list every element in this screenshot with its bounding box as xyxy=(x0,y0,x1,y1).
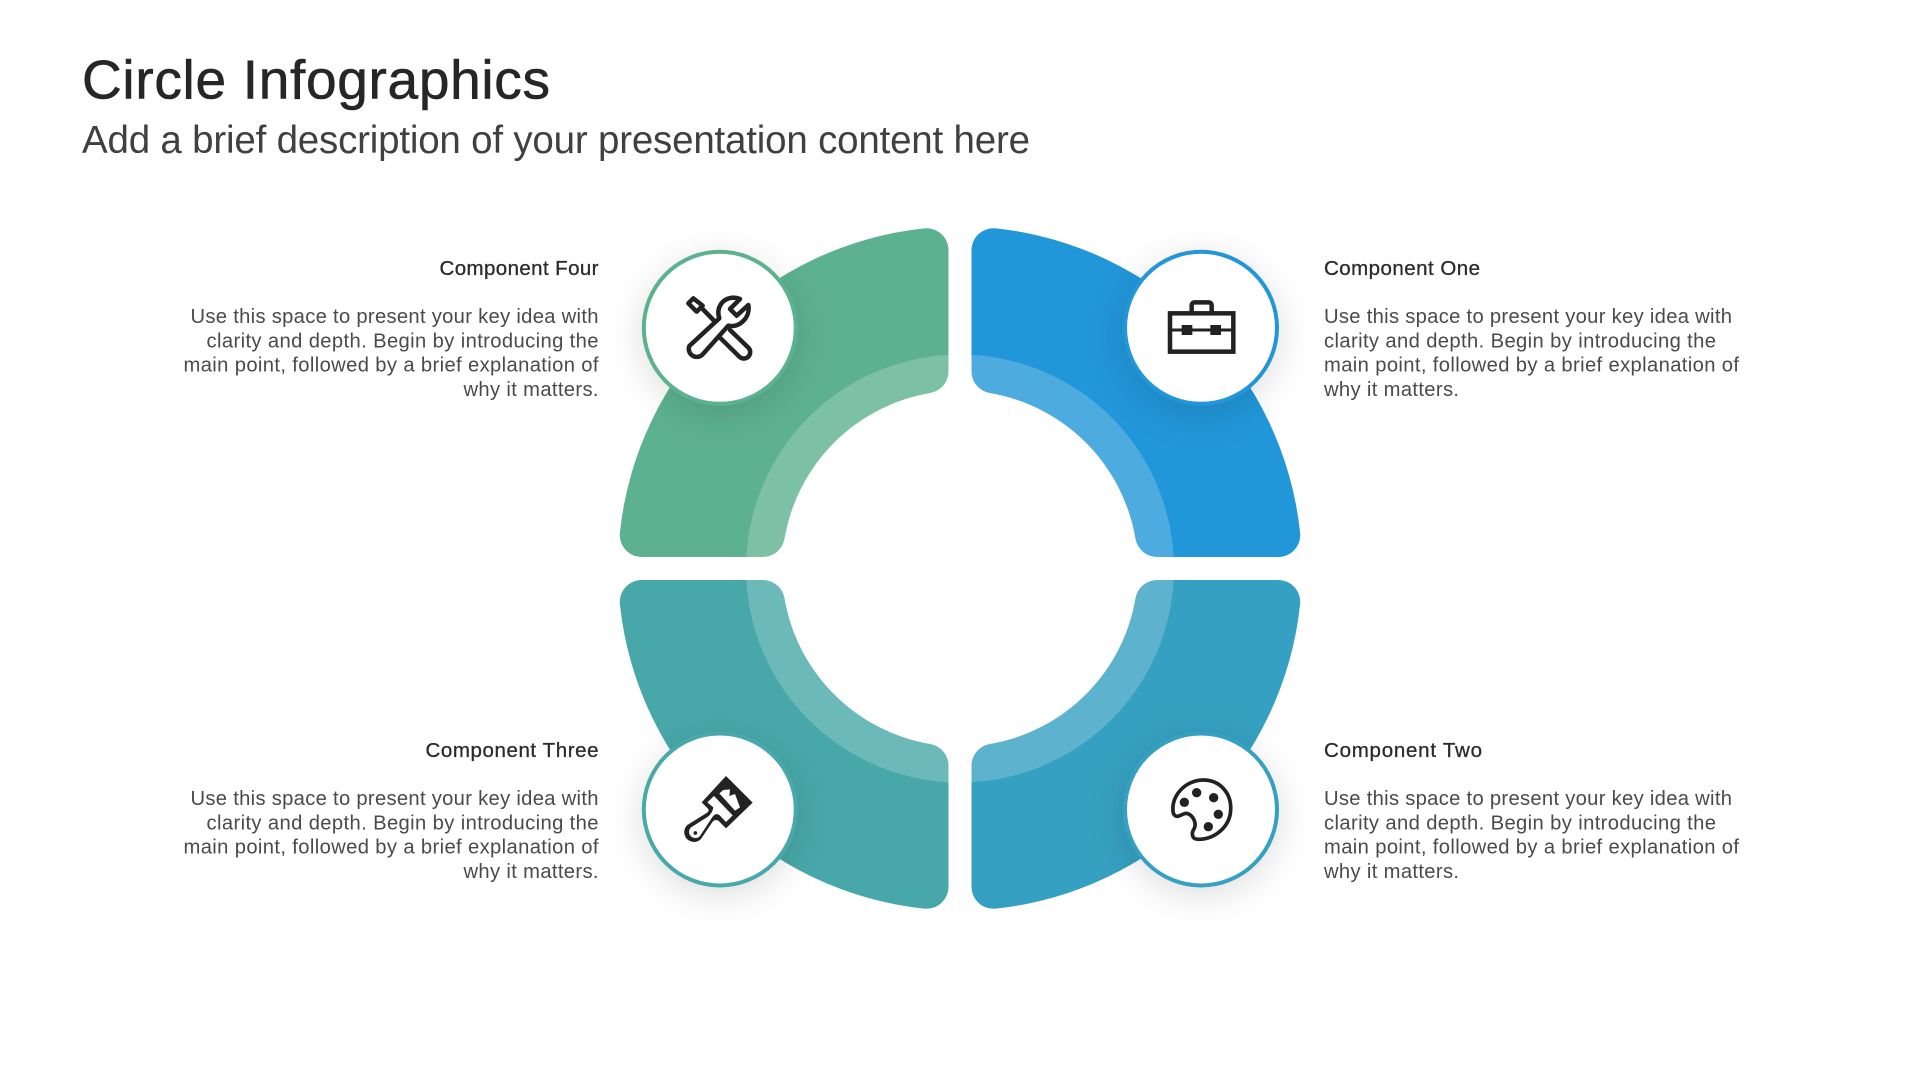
icon: toolbox xyxy=(1170,302,1233,352)
text: component three: Use this space to present your key idea with xyxy=(190,788,598,810)
text: component one xyxy=(1323,257,1739,401)
text: component four: Component Four xyxy=(440,257,599,280)
text: component three xyxy=(184,739,599,883)
segment: component three xyxy=(620,580,948,909)
text: component two: main point, followed by a brief explanation of xyxy=(1324,836,1739,858)
text: component two xyxy=(1323,739,1739,883)
title: Circle Infographics xyxy=(82,48,550,110)
text: component four: why it matters. xyxy=(462,379,598,401)
text: component three: clarity and depth. Begin by introducing the xyxy=(206,812,598,834)
text: component four xyxy=(184,257,599,401)
text: component one: Component One xyxy=(1324,257,1480,280)
text: component one: clarity and depth. Begin by introducing the xyxy=(1324,330,1716,352)
badge: component four xyxy=(644,252,796,404)
text: component one: main point, followed by a brief explanation of xyxy=(1324,354,1739,376)
text: component three: why it matters. xyxy=(462,861,598,883)
badge: component two xyxy=(1125,734,1277,886)
text: component three: main point, followed by a brief explanation of xyxy=(184,836,599,858)
text: component two: why it matters. xyxy=(1323,861,1459,883)
text: component four: Use this space to present your key idea with xyxy=(190,306,598,328)
badge: component one xyxy=(1125,252,1277,404)
text: component two: clarity and depth. Begin by introducing the xyxy=(1324,812,1716,834)
segment: component four xyxy=(620,228,948,557)
segment: component two xyxy=(972,580,1300,909)
text: component one: why it matters. xyxy=(1323,379,1459,401)
subtitle: Add a brief description of your presentation content here xyxy=(82,119,1030,162)
segment: component one xyxy=(972,228,1300,557)
text: component two: Component Two xyxy=(1324,739,1482,762)
text: component one: Use this space to present your key idea with xyxy=(1324,306,1732,328)
badge: component three xyxy=(644,734,796,886)
text: component four: main point, followed by a brief explanation of xyxy=(184,354,599,376)
icon: paint brush xyxy=(684,776,753,842)
text: component two: Use this space to present your key idea with xyxy=(1324,788,1732,810)
icon: palette xyxy=(1173,780,1231,839)
text: component four: clarity and depth. Begin by introducing the xyxy=(206,330,598,352)
text: component three: Component Three xyxy=(426,739,598,762)
icon: wrench and screwdriver xyxy=(688,298,750,359)
